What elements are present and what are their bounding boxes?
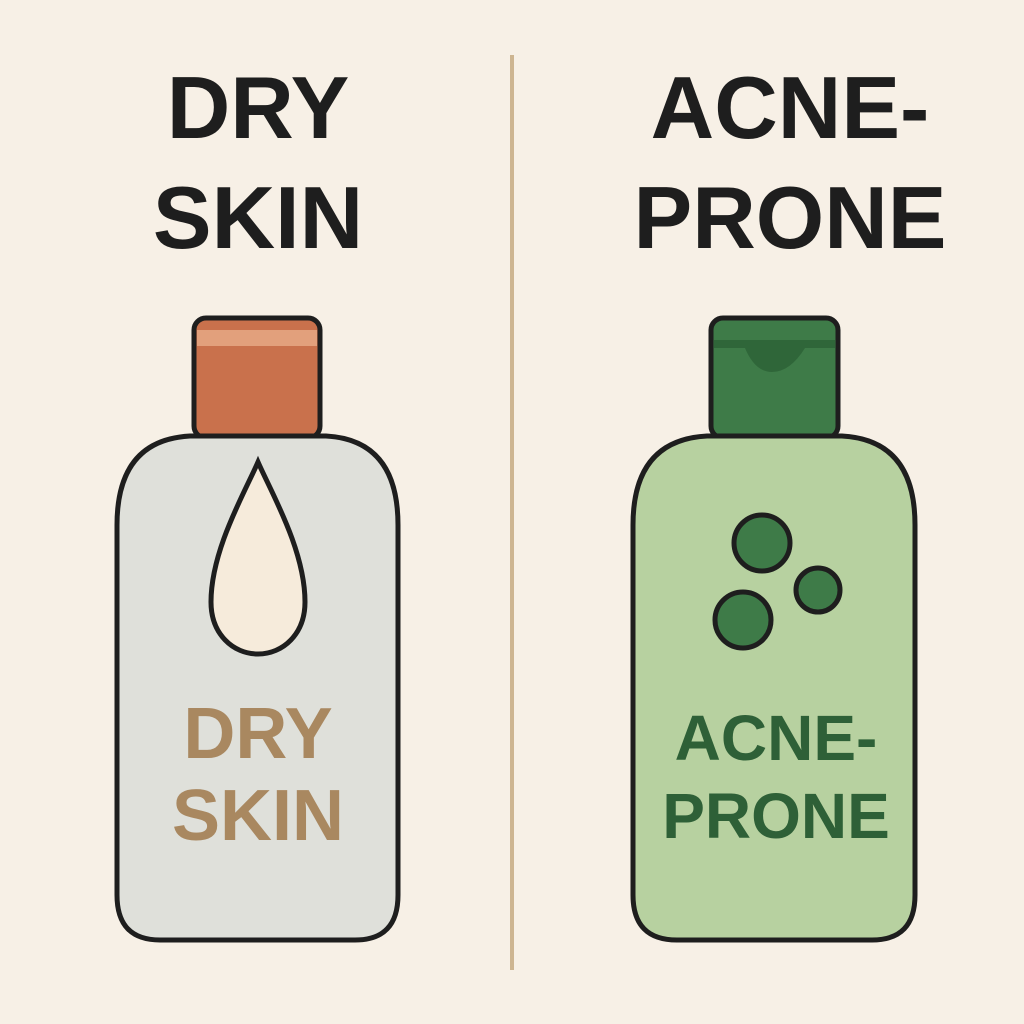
- divider: [510, 55, 514, 970]
- icon: water drop: [211, 462, 305, 654]
- title: acne-prone: ACNE-: [651, 58, 929, 157]
- title: acne-prone: PRONE: [634, 168, 946, 267]
- bottle: dry skin: [117, 318, 398, 940]
- title: dry skin: SKIN: [153, 168, 363, 267]
- bottle label: acne-prone: ACNE-: [675, 702, 877, 774]
- title: dry skin: [153, 58, 363, 267]
- icon: acne spots: [715, 515, 840, 648]
- bottle: acne-prone: [633, 318, 915, 940]
- title: acne-prone: [634, 58, 946, 267]
- title: dry skin: DRY: [167, 58, 349, 157]
- bottle: acne-prone: PRONE: [662, 780, 890, 852]
- bottle label: dry skin: DRY: [183, 694, 333, 774]
- bottle: dry skin: SKIN: [172, 776, 344, 856]
